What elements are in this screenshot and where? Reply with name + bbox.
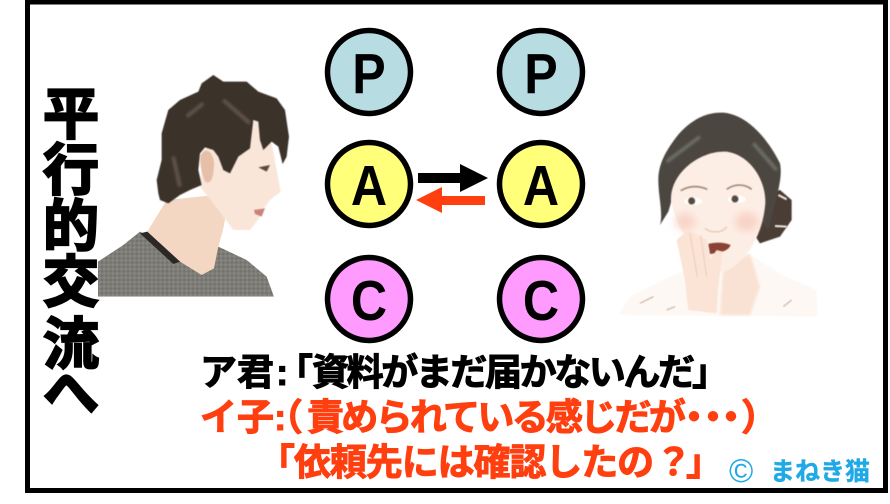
arrow: red, right to left [416,187,485,213]
mouth [708,243,731,254]
dialogue line: ア君: 」 [692,352,729,393]
dialogue line: イ子 speech: 」 [686,442,723,483]
cheek blush [735,212,758,231]
vertical title [43,83,99,425]
nose [705,227,727,232]
left cheek blush [674,213,696,230]
arrow: black, left to right [418,164,488,192]
ego state P left: P [352,42,386,106]
back hair [658,113,781,232]
face [200,120,281,230]
ear [200,151,214,182]
copyright credit [729,452,870,489]
blouse pattern [640,297,792,310]
dialogue line: ア君: 資料がまだ届かないんだ [312,352,694,393]
dialogue line: イ子 thought: 責められている感じだが [307,397,686,438]
neck [720,253,760,315]
blouse [618,257,817,317]
vertical title: 的 [43,195,99,258]
dialogue line: ア君: : [276,352,288,393]
dialogue line: イ子 thought: ・ [712,397,750,438]
dialogue line: イ子 thought: ） [741,397,778,438]
hair highlights [667,137,777,170]
ego state C left: C [351,269,387,333]
eye left [684,197,702,205]
dialogue line: イ子 thought [200,397,778,438]
vertical title: 流 [43,313,99,376]
ego state A right [500,142,582,226]
face [671,152,765,272]
vertical title: 行 [43,139,99,202]
vertical title: 交 [43,251,99,314]
dialogue line: イ子 speech: ？ [655,442,692,483]
photo: man in profile [98,75,289,297]
vertical title: 平 [43,83,99,146]
ego state P right [500,30,582,114]
hair bun [753,190,792,243]
ego state C right [500,258,582,340]
ego state A left [328,142,410,226]
dialogue line: イ子 thought: ・ [694,397,732,438]
sweater [98,232,274,297]
brows [681,185,752,191]
ego state P left [328,30,410,114]
hair [157,75,289,203]
lips [254,208,265,217]
neck [147,193,230,275]
eye right [728,195,746,203]
ego state P right: P [524,42,558,106]
hand [677,229,723,313]
dialogue line: イ子 speech: 依頼先には確認したの [294,442,653,483]
ego state C right: C [523,269,559,333]
dialogue line: ア君: ア君 [200,352,274,393]
dialogue line: イ子 thought: : [274,397,286,438]
ego state A right: A [523,154,559,218]
ego state C left [328,258,410,340]
dialogue line: イ子 thought: イ子 [200,397,274,438]
copyright credit: © [729,452,753,489]
undershirt collar [140,232,180,264]
dialogue line: イ子 thought: ・ [676,397,712,438]
photo: surprised woman [618,113,817,317]
vertical title: へ [43,362,99,425]
dialogue line: イ子 thought: （ [266,397,303,438]
dialogue line: イ子 speech: 「 [258,442,295,483]
hair highlights [173,100,250,187]
hair highlights in bun [775,195,787,227]
eye [258,165,270,172]
finger lines [690,233,707,277]
ego state A left: A [351,154,387,218]
copyright credit: まねき猫 [770,458,870,486]
dialogue line: ア君: 「 [276,352,313,393]
